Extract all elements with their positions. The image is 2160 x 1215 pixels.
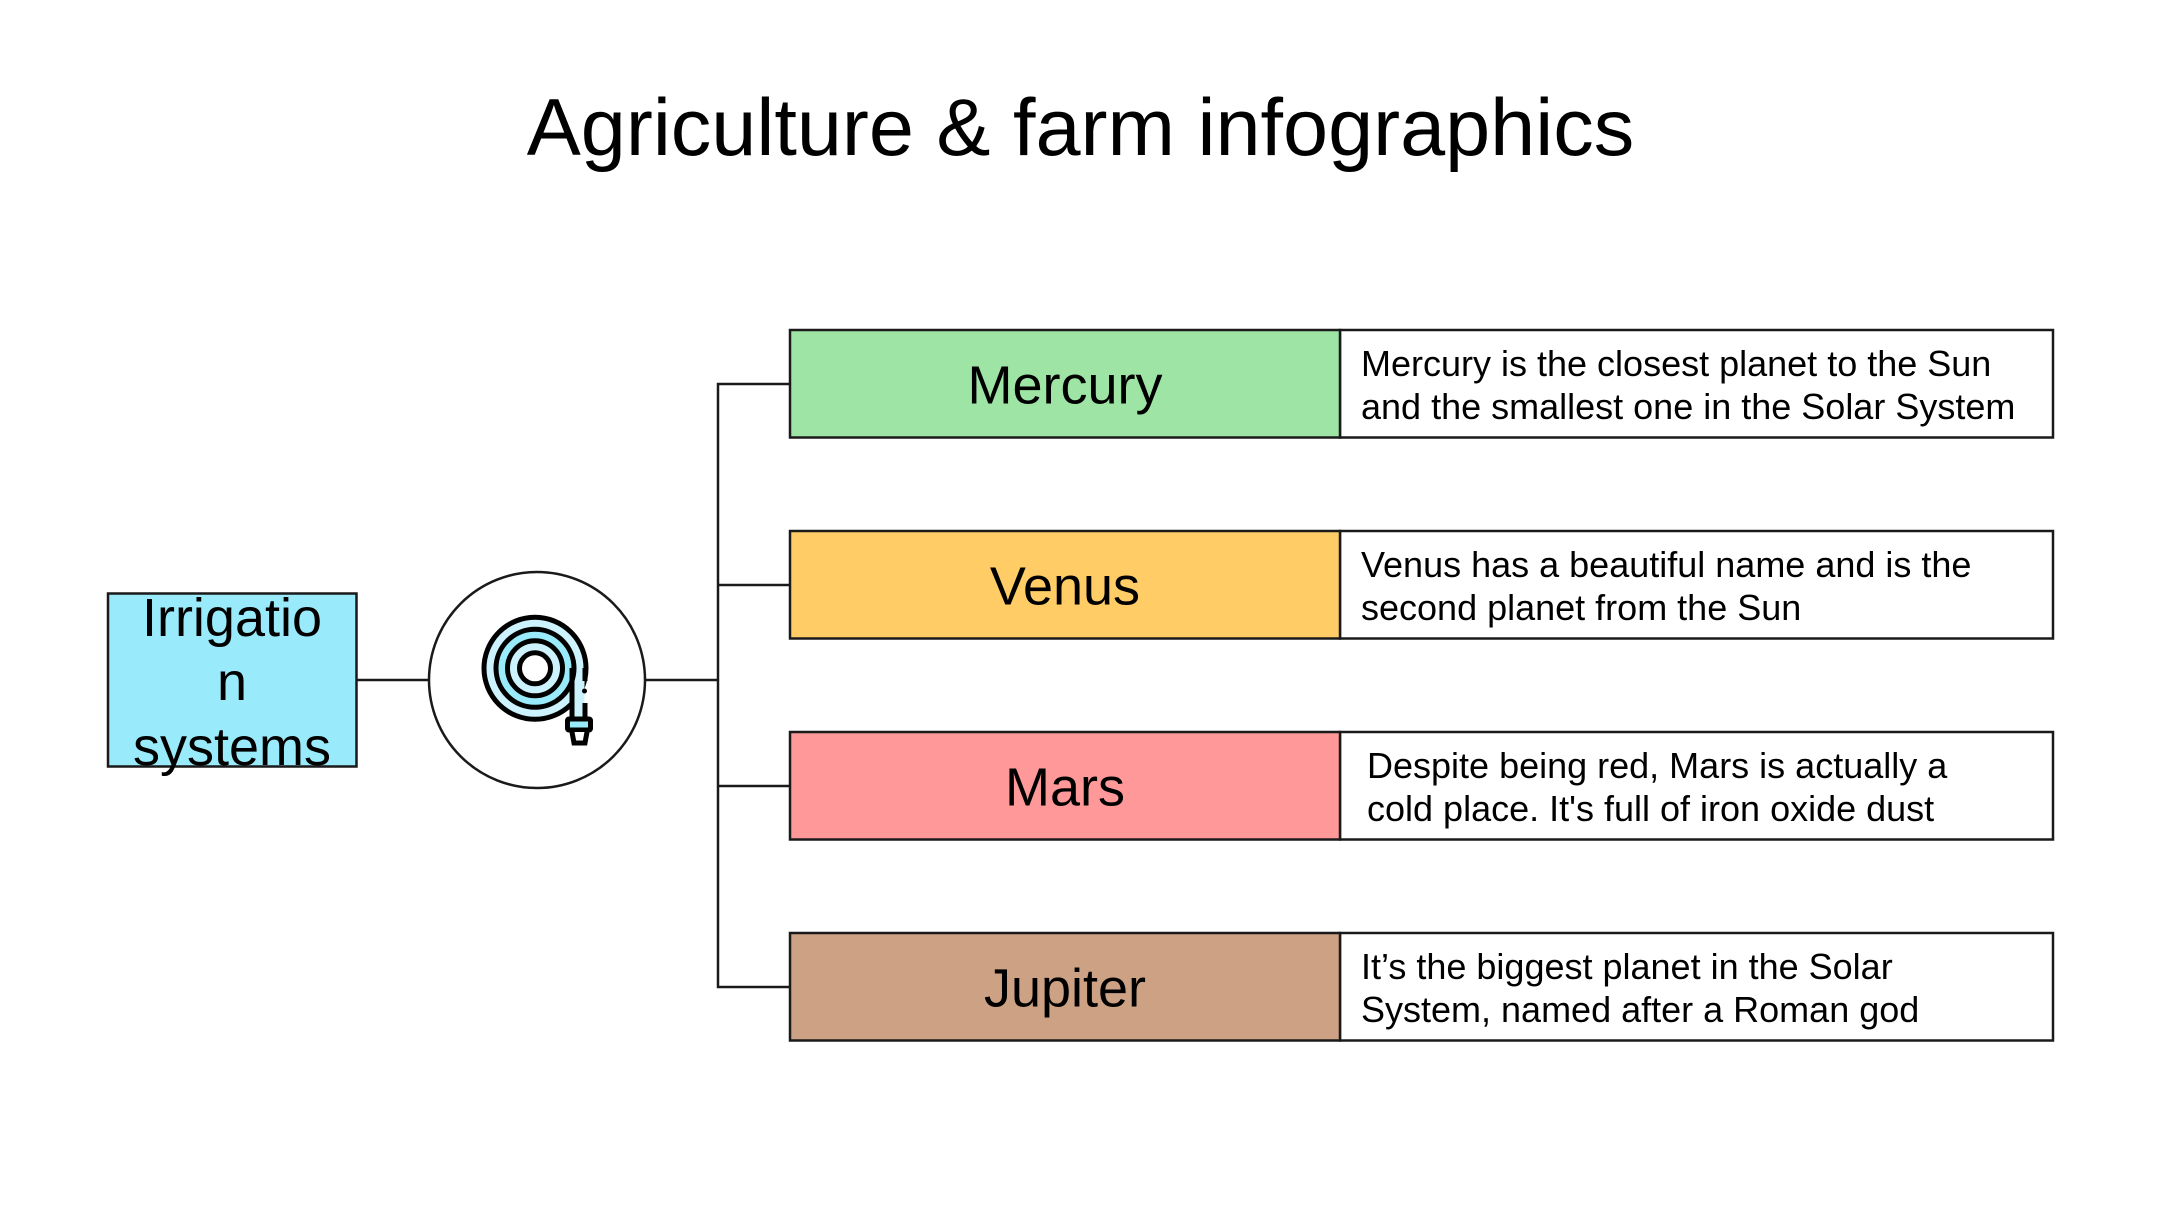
row: Jupiter [790,933,2053,1040]
box: Irrigation systems: systems [133,717,331,777]
row: Mercury: Mercury is the closest planet to the Sun [1361,343,1991,384]
row: Mars: cold place. It's full of iron oxide dust [1367,788,1934,829]
box: Irrigation systems [108,588,356,777]
row: Venus: second planet from the Sun [1361,587,1801,628]
row: Mercury [790,330,2053,438]
row: Venus [790,531,2053,638]
box: Irrigation systems: Irrigatio [142,588,322,648]
row: Jupiter: System, named after a Roman god [1361,989,1919,1030]
row: Mars [790,732,2053,840]
icon: coiled hose [484,617,590,743]
icon circle [429,572,645,788]
title: Agriculture & farm infographics [527,83,1634,173]
row: Jupiter: Jupiter [984,958,1146,1018]
row: Mars: Mars [1005,758,1125,818]
box: Irrigation systems: n [217,652,247,712]
row: Venus: Venus [990,556,1140,616]
row: Mercury: and the smallest one in the Solar System [1361,386,2015,427]
row: Mars: Despite being red, Mars is actually a [1367,745,1948,786]
row: Mercury: Mercury [967,356,1163,416]
row: Venus: Venus has a beautiful name and is the [1361,544,1971,585]
connector lines [356,384,790,987]
row: Jupiter: It’s the biggest planet in the Solar [1361,946,1893,987]
